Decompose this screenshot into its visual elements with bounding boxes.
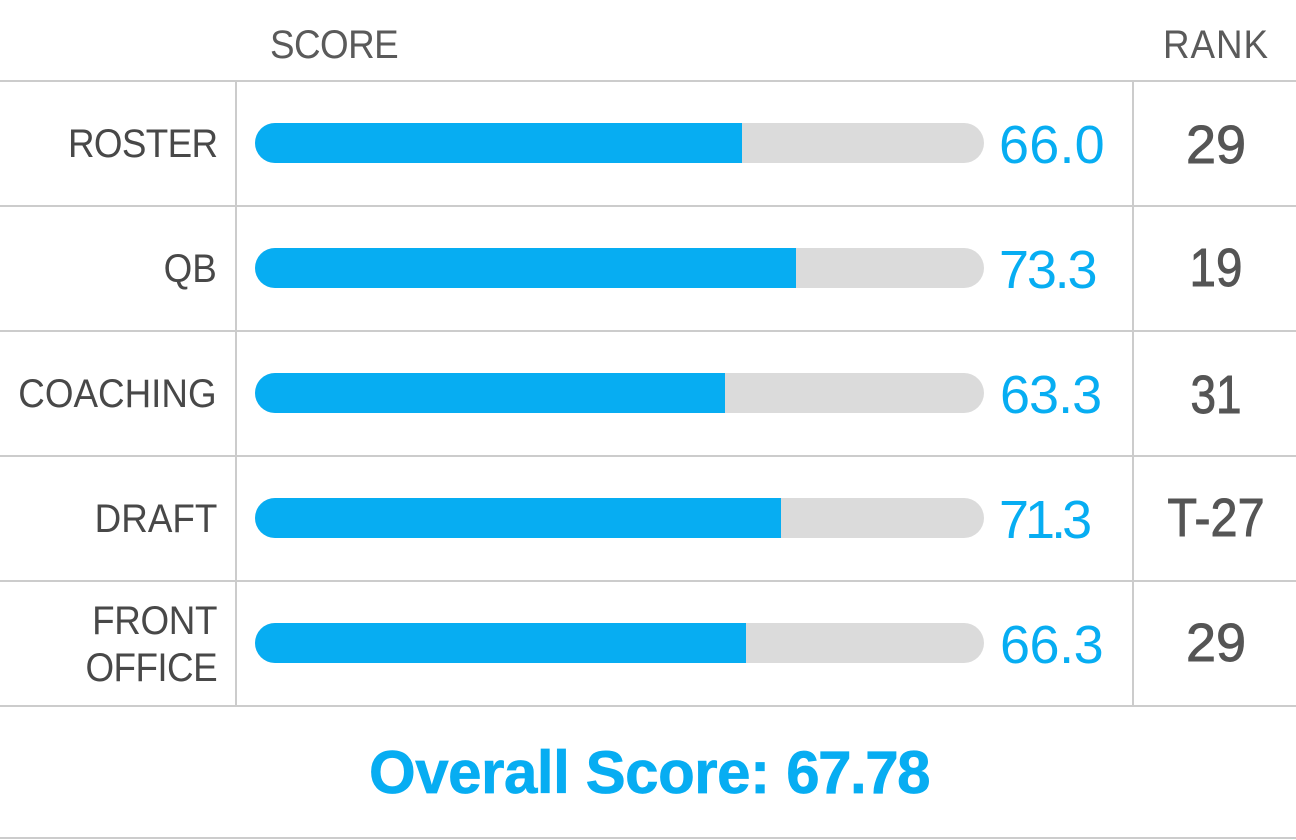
row: coaching: [19, 365, 1242, 425]
bar: coaching 63.3: [255, 373, 984, 413]
heading: rank column: RANK: [1163, 23, 1269, 67]
label: draft: DRAFT: [94, 497, 217, 541]
rank: coaching: 31: [1190, 365, 1242, 425]
bar: qb 73.3: [255, 248, 984, 288]
label: coaching: COACHING: [19, 372, 217, 416]
overall score: Overall Score: 67.78: [369, 739, 929, 806]
row: roster: [68, 115, 1246, 175]
value: front office: 66.3: [1000, 615, 1103, 675]
row: draft: [94, 488, 1265, 550]
label: qb: QB: [164, 247, 217, 291]
value: qb: 73.3: [999, 240, 1095, 300]
rank: draft: T-27: [1167, 488, 1265, 548]
bar: roster 66.0: [255, 123, 984, 163]
value: roster: 66.0: [999, 115, 1105, 175]
label: front office: OFFICE: [85, 646, 217, 690]
rank: roster: 29: [1186, 115, 1246, 175]
row: front office: [85, 599, 1246, 690]
heading: score column: SCORE: [270, 23, 398, 67]
value: coaching: 63.3: [1000, 365, 1101, 425]
value: draft: 71.3: [999, 490, 1088, 550]
label: roster: ROSTER: [68, 122, 217, 166]
label: front office: FRONT: [92, 599, 217, 643]
bar: draft 71.3: [255, 498, 984, 538]
label: front office: [85, 599, 217, 690]
row: qb: [164, 238, 1242, 300]
bar: front office 66.3: [255, 623, 984, 663]
rank: front office: 29: [1186, 613, 1246, 673]
rank: qb: 19: [1190, 238, 1242, 298]
